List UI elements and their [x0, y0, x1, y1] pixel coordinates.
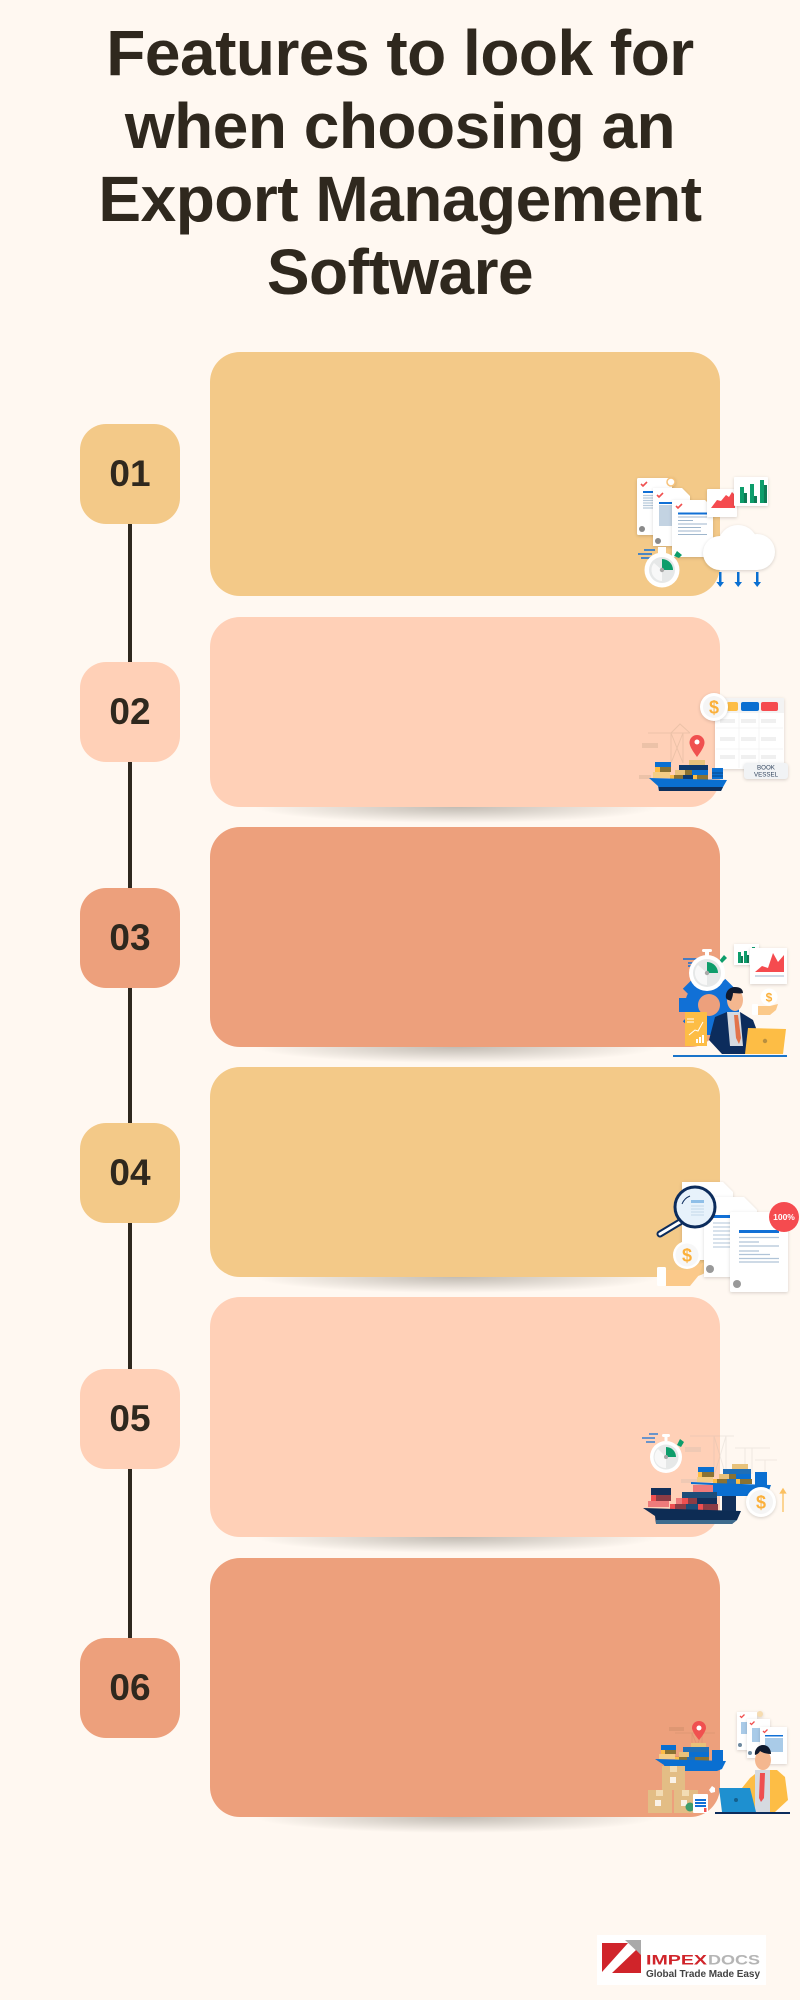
calculator: [686, 1794, 708, 1813]
number badge 01: [80, 424, 180, 524]
cardboard boxes: [648, 1766, 698, 1813]
blue cargo ship: [691, 1464, 771, 1496]
dollar coin: [700, 693, 728, 721]
dollar coin: $: [709, 698, 719, 718]
number badge 05: [80, 1369, 180, 1469]
rising arrow: [780, 1489, 786, 1512]
card shadow 6: [255, 1801, 659, 1833]
card shadow 4: [255, 1261, 659, 1293]
faint cranes: [681, 1436, 777, 1483]
logo wordmark: [646, 1952, 760, 1980]
number badge 06: 06: [109, 1667, 151, 1708]
card shadow 2: [255, 791, 659, 823]
book vessel button: BOOK: [757, 764, 776, 772]
download arrows: [716, 572, 761, 587]
number badge 01: 01: [109, 453, 151, 494]
title: Features to look for: [106, 17, 694, 89]
green bar chart: [734, 944, 759, 965]
blue laptop: [709, 1786, 756, 1812]
hand with dollar coin: [657, 1241, 703, 1286]
panel: feature card 02: [210, 617, 720, 807]
icon: magnifier, documents and 100 percent badge: [656, 1182, 799, 1294]
panel: feature card 01: [210, 352, 720, 596]
number badge 06: [80, 1638, 180, 1738]
logo wordmark: IMPEX: [646, 1952, 708, 1968]
document two: [653, 488, 690, 546]
location pin: [690, 735, 704, 757]
dark cargo ship: [643, 1485, 741, 1524]
title: [98, 17, 702, 308]
location pin: [692, 1721, 706, 1740]
number badge 03: [80, 888, 180, 988]
logo wordmark: DOCS: [708, 1952, 760, 1968]
middle document: [704, 1197, 757, 1277]
businessman: [709, 987, 756, 1054]
green bar chart: [734, 477, 768, 506]
icon: boxes, ship, documents and businessman: [648, 1711, 790, 1814]
blue cargo ship: [649, 760, 727, 791]
title: Software: [267, 236, 533, 308]
number badge 02: 02: [109, 691, 151, 732]
small documents: [737, 1711, 787, 1764]
stopwatch: [642, 1434, 684, 1473]
icon: businessman with gear and stopwatch: [673, 944, 788, 1057]
faint crane: [639, 724, 690, 779]
number badge 05: 05: [109, 1398, 151, 1439]
stopwatch: [683, 949, 727, 991]
book vessel button: [744, 763, 788, 779]
yellow report card: [685, 1012, 707, 1046]
icon: documents, stopwatch, charts and cloud: [636, 476, 776, 588]
100 percent badge: 100%: [773, 1212, 795, 1222]
number badge 04: [80, 1123, 180, 1223]
red area chart: [750, 948, 787, 984]
icon: cargo ship booking: [639, 693, 790, 791]
card shadow 3: [255, 1031, 659, 1063]
logo wordmark: Global Trade Made Easy: [646, 1969, 760, 1980]
card shadow 5: [255, 1521, 659, 1553]
desk line: [715, 1812, 790, 1814]
book vessel button: VESSEL: [754, 772, 779, 778]
booking table: [715, 698, 784, 769]
panel: feature card 06: [210, 1558, 720, 1817]
red area chart: [707, 489, 737, 517]
desk line: [673, 1055, 787, 1057]
logo mark: [602, 1940, 641, 1973]
back document: [682, 1182, 733, 1260]
icon: two cargo ships, stopwatch and rising dollar: [642, 1433, 787, 1524]
cargo ship: [655, 1743, 726, 1771]
yellow laptop: [745, 1028, 786, 1054]
stopwatch: [638, 547, 682, 588]
blue gear: [679, 975, 739, 1035]
logo: ImpexDocs: [597, 1935, 766, 1985]
businessman: [742, 1745, 788, 1812]
panel: feature card 05: [210, 1297, 720, 1537]
magnifying glass: [660, 1187, 715, 1234]
panel: feature card 04: [210, 1067, 720, 1277]
panel: feature card 03: [210, 827, 720, 1047]
front document: [730, 1212, 788, 1292]
title: when choosing an: [125, 90, 675, 162]
number badge 02: [80, 662, 180, 762]
hand with dollar coin: $: [766, 990, 773, 1004]
number badge 04: 04: [109, 1152, 151, 1193]
document one: [637, 478, 675, 535]
100 percent badge: [769, 1202, 799, 1232]
dollar coin: $: [756, 1492, 766, 1512]
faint crane: [666, 1727, 715, 1759]
hand with dollar coin: $: [682, 1246, 692, 1266]
timeline connector line: [128, 520, 132, 1645]
title: Export Management: [98, 163, 702, 235]
cloud: [703, 525, 775, 570]
number badge 03: 03: [109, 917, 151, 958]
document three: [672, 500, 713, 557]
dollar coin: [746, 1487, 776, 1517]
